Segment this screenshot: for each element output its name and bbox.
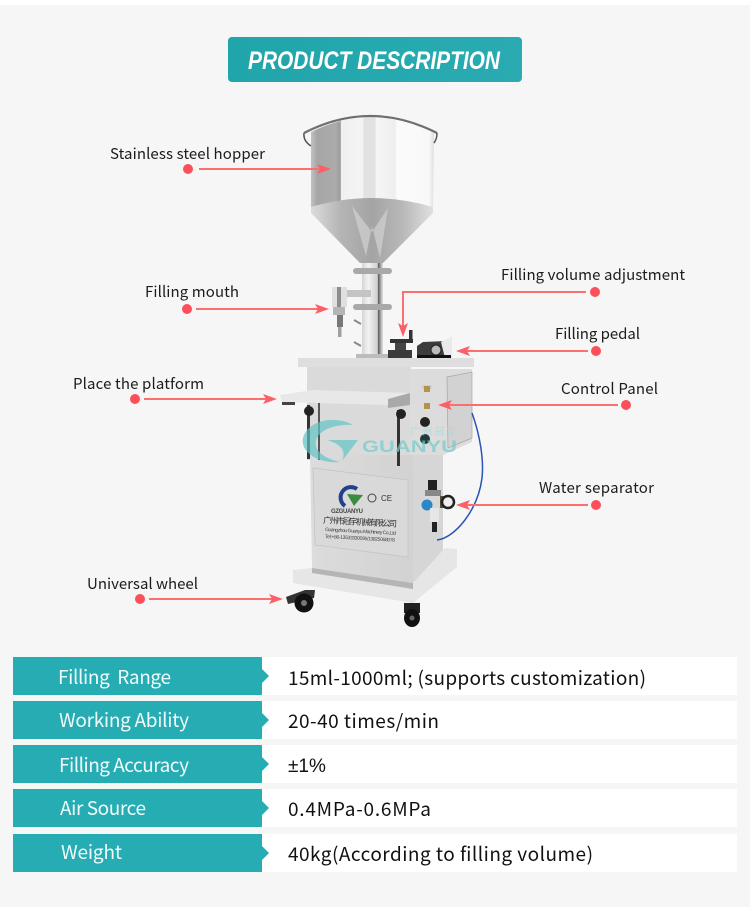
name plate [313, 468, 408, 557]
row: filling accuracy: Filling Accuracy [59, 751, 189, 778]
callout: place the platform [73, 373, 277, 404]
callout: filling pedal [456, 323, 640, 356]
upper cabinet [307, 367, 411, 460]
callout: filling volume adjustment [398, 264, 685, 337]
callout: water separator: Water separator [539, 477, 654, 498]
spec table [13, 657, 737, 872]
name plate: GZGUANYU [331, 509, 363, 515]
title banner [228, 37, 522, 82]
callout: universal wheel: Universal wheel [87, 573, 198, 594]
row: filling range: 15ml-1000ml; (supports customization) [288, 664, 646, 691]
row: working ability: 20-40 times/min [288, 707, 439, 734]
callout: place the platform: Place the platform [73, 373, 204, 394]
callout: stainless steel hopper [110, 143, 331, 174]
row: filling accuracy [13, 745, 737, 783]
row: weight [13, 834, 737, 872]
watermark: GUANYU [362, 437, 457, 456]
column and clamps [353, 263, 392, 359]
water separator [422, 480, 454, 532]
callout: stainless steel hopper: Stainless steel hopper [110, 143, 265, 164]
watermark: 广州冠宇 [410, 425, 457, 438]
name plate: CE [381, 494, 392, 503]
control box [410, 369, 472, 455]
callout: control panel [438, 378, 658, 410]
row: weight: 40kg(According to filling volume) [288, 840, 593, 867]
callout: water separator [456, 477, 654, 510]
callout: filling mouth [145, 281, 329, 314]
name plate: Tel:+86-13533330095/13825068078 [325, 534, 395, 544]
callout: filling volume adjustment: Filling volume adjustment [501, 264, 685, 285]
casters [286, 590, 420, 627]
row: air source: Air Source [60, 794, 146, 821]
foot pedal [417, 337, 452, 358]
row: filling range [13, 657, 737, 695]
row: working ability: Working Ability [59, 706, 189, 733]
callout: filling mouth: Filling mouth [145, 281, 239, 302]
row: air source: 0.4MPa-0.6MPa [288, 795, 431, 822]
row: filling range: Filling Range [58, 663, 171, 690]
lower cabinet [310, 455, 443, 583]
hopper [304, 116, 437, 263]
air tube [437, 413, 483, 540]
filling mouth nozzle [332, 287, 371, 337]
top plate [298, 358, 474, 367]
row: filling accuracy: ±1% [288, 756, 326, 777]
machine illustration [280, 116, 483, 627]
name plate: Guangzhou Guanyu Machinery Co.,Ltd [325, 527, 396, 537]
volume adjustment knob [388, 330, 413, 359]
platform [280, 390, 410, 466]
callout: universal wheel [87, 573, 283, 604]
watermark [303, 420, 457, 462]
base tray [293, 548, 457, 603]
row: working ability [13, 701, 737, 739]
callout: filling pedal: Filling pedal [555, 323, 640, 344]
name plate: 广州市冠宇机械有限公司 [323, 515, 397, 529]
row: weight: Weight [61, 838, 122, 865]
callout: control panel: Control Panel [561, 378, 658, 399]
title banner: PRODUCT DESCRIPTION [248, 47, 501, 75]
row: air source [13, 789, 737, 827]
